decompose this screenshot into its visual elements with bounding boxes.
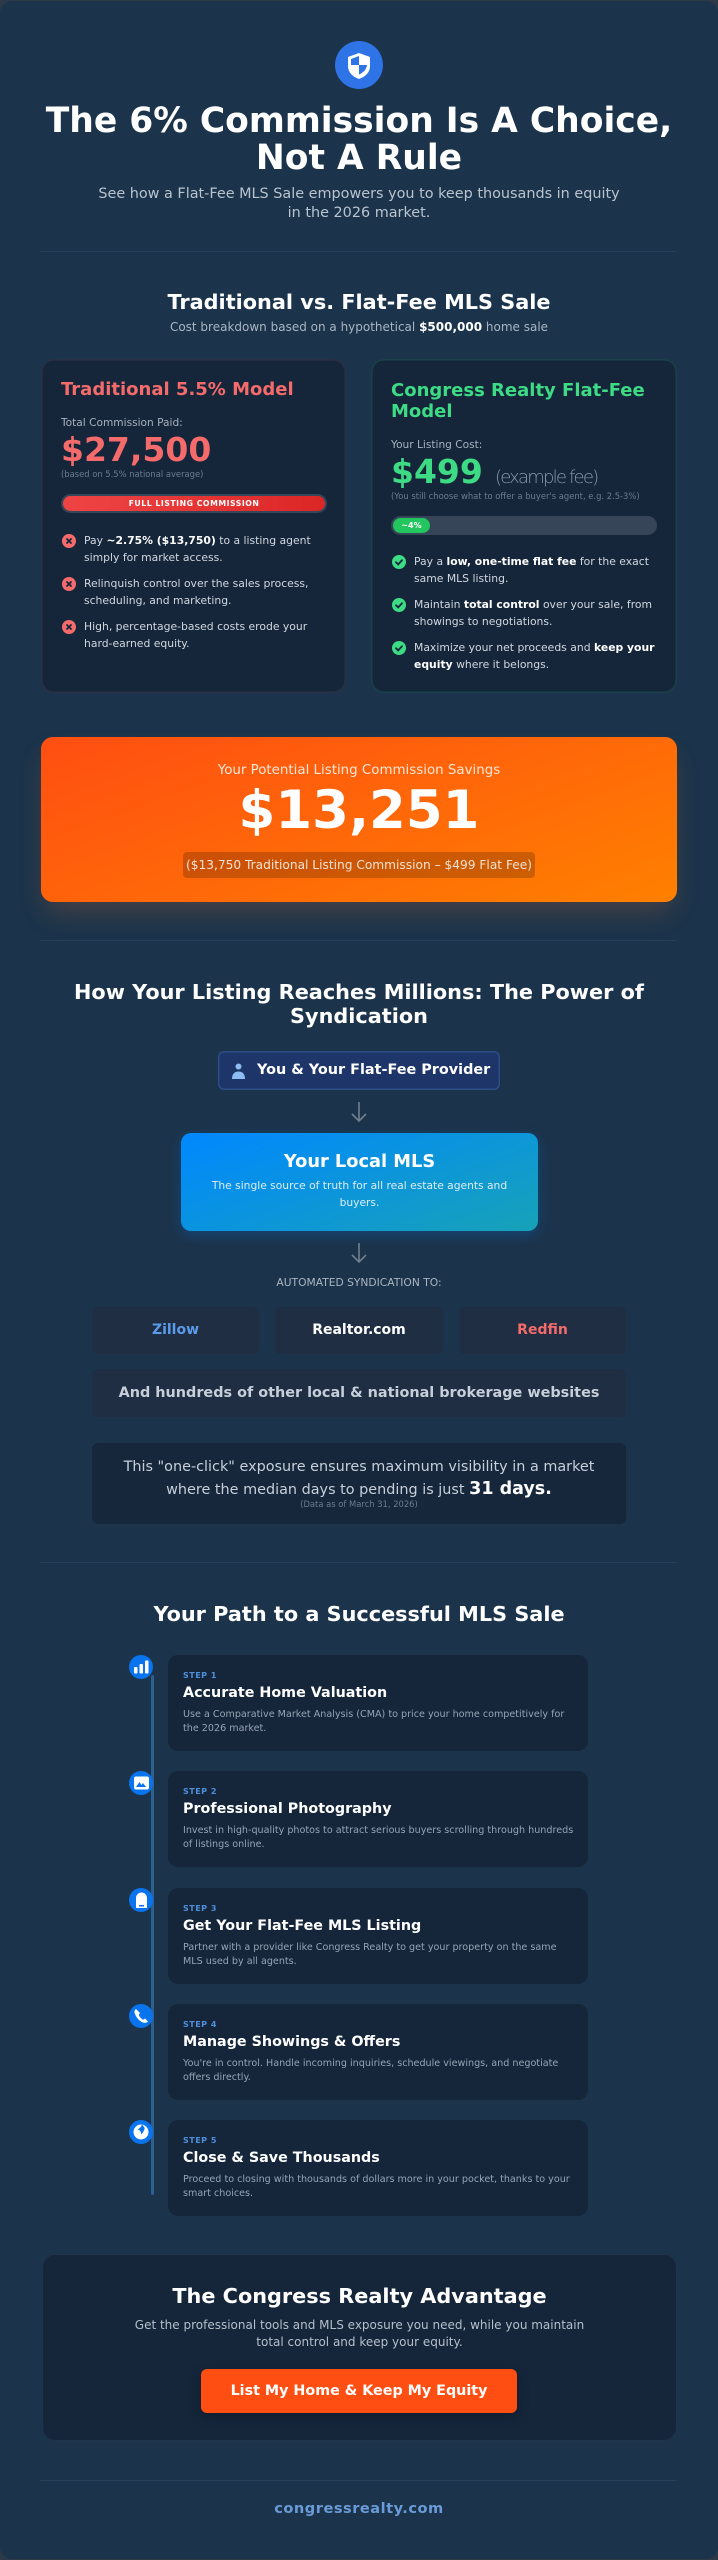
comparison heading xyxy=(167,290,550,334)
title: Not A Rule xyxy=(256,138,462,178)
point 1 xyxy=(84,534,311,564)
provider label: You & Your Flat-Fee Provider xyxy=(257,1062,490,1078)
exposure text xyxy=(124,1458,594,1498)
exposure callout xyxy=(92,1443,626,1524)
point 1: Pay a low, one-time flat fee for the exact xyxy=(414,555,649,568)
path heading: Your Path to a Successful MLS Sale xyxy=(153,1602,565,1626)
step 1: Use a Comparative Market Analysis (CMA) to price your home competitively for xyxy=(183,1709,564,1720)
icon: phone xyxy=(129,2004,153,2028)
platform: Realtor.com: Realtor.com xyxy=(312,1322,406,1338)
panel: call to action xyxy=(42,2254,677,2441)
MLS description: buyers. xyxy=(340,1196,379,1209)
point 3: Maximize your net proceeds and keep your xyxy=(414,641,654,654)
data date: (Data as of March 31, 2026) xyxy=(300,1499,418,1509)
subtitle: See how a Flat-Fee MLS Sale empowers you to keep thousands in equity xyxy=(98,186,620,202)
step 4: You're in control. Handle incoming inquiries, schedule viewings, and negotiate xyxy=(183,2058,558,2068)
CTA text: total control and keep your equity. xyxy=(256,2335,463,2349)
icon: x xyxy=(62,620,76,634)
arrow xyxy=(352,1102,366,1122)
panel heading xyxy=(391,380,645,422)
title xyxy=(46,101,672,178)
CTA text xyxy=(135,2318,584,2349)
point 2: scheduling, and marketing. xyxy=(84,594,232,606)
panel heading: Model xyxy=(391,401,453,422)
step 1 xyxy=(168,1655,588,1751)
bar: flat fee share xyxy=(391,516,657,535)
step 1: STEP 1 xyxy=(183,1671,217,1680)
footer link: congressrealty.com xyxy=(274,2500,444,2517)
icon: check xyxy=(392,555,406,569)
section subtitle: Cost breakdown based on a hypothetical $500,000 home sale xyxy=(170,320,548,334)
cost label: Your Listing Cost: xyxy=(391,439,482,451)
exposure text: This "one-click" exposure ensures maximum visibility in a market xyxy=(124,1458,594,1474)
icon: check xyxy=(392,598,406,612)
point 2 xyxy=(414,598,652,628)
savings label: Your Potential Listing Commission Savings xyxy=(218,763,500,778)
savings amount: $13,251 xyxy=(239,780,479,841)
point 1: Pay ~2.75% ($13,750) to a listing agent xyxy=(84,534,311,547)
timeline line xyxy=(150,1675,154,2195)
commission label: Total Commission Paid: xyxy=(61,417,183,429)
platform: Redfin xyxy=(459,1307,626,1354)
icon: x xyxy=(62,534,76,548)
point 1 xyxy=(414,555,649,584)
section title: Traditional vs. Flat-Fee MLS Sale xyxy=(167,290,550,314)
platform: Zillow: Zillow xyxy=(152,1322,199,1338)
diagram: syndication flow xyxy=(92,1051,626,1524)
icon: x xyxy=(62,577,76,591)
point 3: equity where it belongs. xyxy=(414,658,549,670)
list: flat-fee benefits xyxy=(392,555,654,670)
MLS box xyxy=(181,1133,538,1231)
CTA title: The Congress Realty Advantage xyxy=(172,2284,547,2308)
step 3: MLS used by all agents. xyxy=(183,1956,297,1967)
step 3: Partner with a provider like Congress Realty to get your property on the same xyxy=(183,1942,556,1952)
subtitle xyxy=(98,186,620,221)
step 5: Proceed to closing with thousands of dollars more in your pocket, thanks to your xyxy=(183,2174,570,2185)
subtitle: in the 2026 market. xyxy=(288,205,430,221)
header xyxy=(46,41,672,221)
panel: traditional model xyxy=(41,359,346,693)
point 3: hard-earned equity. xyxy=(84,636,190,650)
panel: flat-fee model xyxy=(371,359,677,693)
list: traditional drawbacks xyxy=(62,534,311,650)
step 2 xyxy=(168,1771,588,1867)
provider box xyxy=(218,1051,500,1090)
point 2: Relinquish control over the sales process, xyxy=(84,577,308,590)
platform: Zillow xyxy=(92,1307,259,1354)
buyer's agent note: (You still choose what to offer a buyer's agent, e.g. 2.5-3%) xyxy=(391,491,640,501)
point 3: High, percentage-based costs erode your xyxy=(84,620,307,633)
step 4 xyxy=(168,2004,588,2100)
step 2: Professional Photography xyxy=(183,1801,392,1817)
icon: shield xyxy=(335,41,383,89)
savings formula: ($13,750 Traditional Listing Commission – $499 Flat Fee) xyxy=(186,858,532,872)
CTA button: List My Home & Keep My Equity xyxy=(231,2383,487,2399)
point 1: simply for market access. xyxy=(84,550,223,564)
step 5: STEP 5 xyxy=(183,2136,217,2145)
syndication label: AUTOMATED SYNDICATION TO: xyxy=(276,1276,442,1289)
exposure text: where the median days to pending is just 31 days. xyxy=(166,1478,552,1498)
step 2: of listings online. xyxy=(183,1839,265,1850)
step 2: Invest in high-quality photos to attract serious buyers scrolling through hundreds xyxy=(183,1825,573,1836)
bar: full listing commission: FULL LISTING COMMISSION xyxy=(129,499,259,508)
syndication heading: Syndication xyxy=(290,1004,428,1028)
platform: Redfin: Redfin xyxy=(517,1322,568,1338)
point 2: showings to negotiations. xyxy=(414,614,552,628)
point 3 xyxy=(84,620,308,650)
MLS description xyxy=(212,1179,507,1209)
example fee note: (example fee) xyxy=(495,467,597,488)
cost amount: $499 xyxy=(391,452,483,491)
point 3 xyxy=(414,641,654,670)
MLS title: Your Local MLS xyxy=(284,1151,435,1172)
savings formula xyxy=(183,852,535,878)
step 3: Get Your Flat-Fee MLS Listing xyxy=(183,1918,421,1934)
icon: photo xyxy=(129,1771,153,1795)
bar: full listing commission xyxy=(61,494,327,513)
title: The 6% Commission Is A Choice, xyxy=(46,101,672,141)
MLS description: The single source of truth for all real estate agents and xyxy=(212,1179,507,1192)
step 5 xyxy=(168,2120,588,2216)
icon: check xyxy=(392,641,406,655)
point 2 xyxy=(84,577,308,606)
step 1: the 2026 market. xyxy=(183,1723,266,1734)
point 2: Maintain total control over your sale, from xyxy=(414,598,652,611)
icon: person xyxy=(232,1064,245,1079)
CTA text: Get the professional tools and MLS exposure you need, while you maintain xyxy=(135,2318,584,2332)
platform: other websites xyxy=(92,1369,626,1417)
point 1: same MLS listing. xyxy=(414,572,508,584)
step 3: STEP 3 xyxy=(183,1904,217,1912)
icon: chart xyxy=(129,1655,153,1679)
commission note: (based on 5.5% national average) xyxy=(61,469,203,479)
icon: globe xyxy=(129,2120,153,2144)
icon: listing xyxy=(129,1888,153,1912)
syndication heading: How Your Listing Reaches Millions: The Power of xyxy=(74,980,644,1004)
syndication heading xyxy=(74,980,644,1028)
CTA button xyxy=(201,2369,517,2413)
panel heading: Traditional 5.5% Model xyxy=(61,379,294,400)
step 5: Close & Save Thousands xyxy=(183,2150,380,2166)
arrow xyxy=(352,1243,366,1263)
timeline: steps xyxy=(129,1655,588,2216)
bar: flat fee share: ~4% xyxy=(401,521,422,530)
panel heading: Congress Realty Flat-Fee xyxy=(391,380,645,400)
platform: Realtor.com xyxy=(275,1307,443,1354)
panel: savings callout xyxy=(41,737,677,902)
step 1: Accurate Home Valuation xyxy=(183,1685,387,1701)
step 5: smart choices. xyxy=(183,2188,253,2199)
commission amount: $27,500 xyxy=(61,430,211,469)
step 3 xyxy=(168,1888,588,1984)
step 4: Manage Showings & Offers xyxy=(183,2034,400,2050)
step 2: STEP 2 xyxy=(183,1787,217,1796)
step 4: STEP 4 xyxy=(183,2020,217,2028)
platform: other websites: And hundreds of other local & national brokerage websites xyxy=(119,1385,599,1401)
step 4: offers directly. xyxy=(183,2072,251,2083)
